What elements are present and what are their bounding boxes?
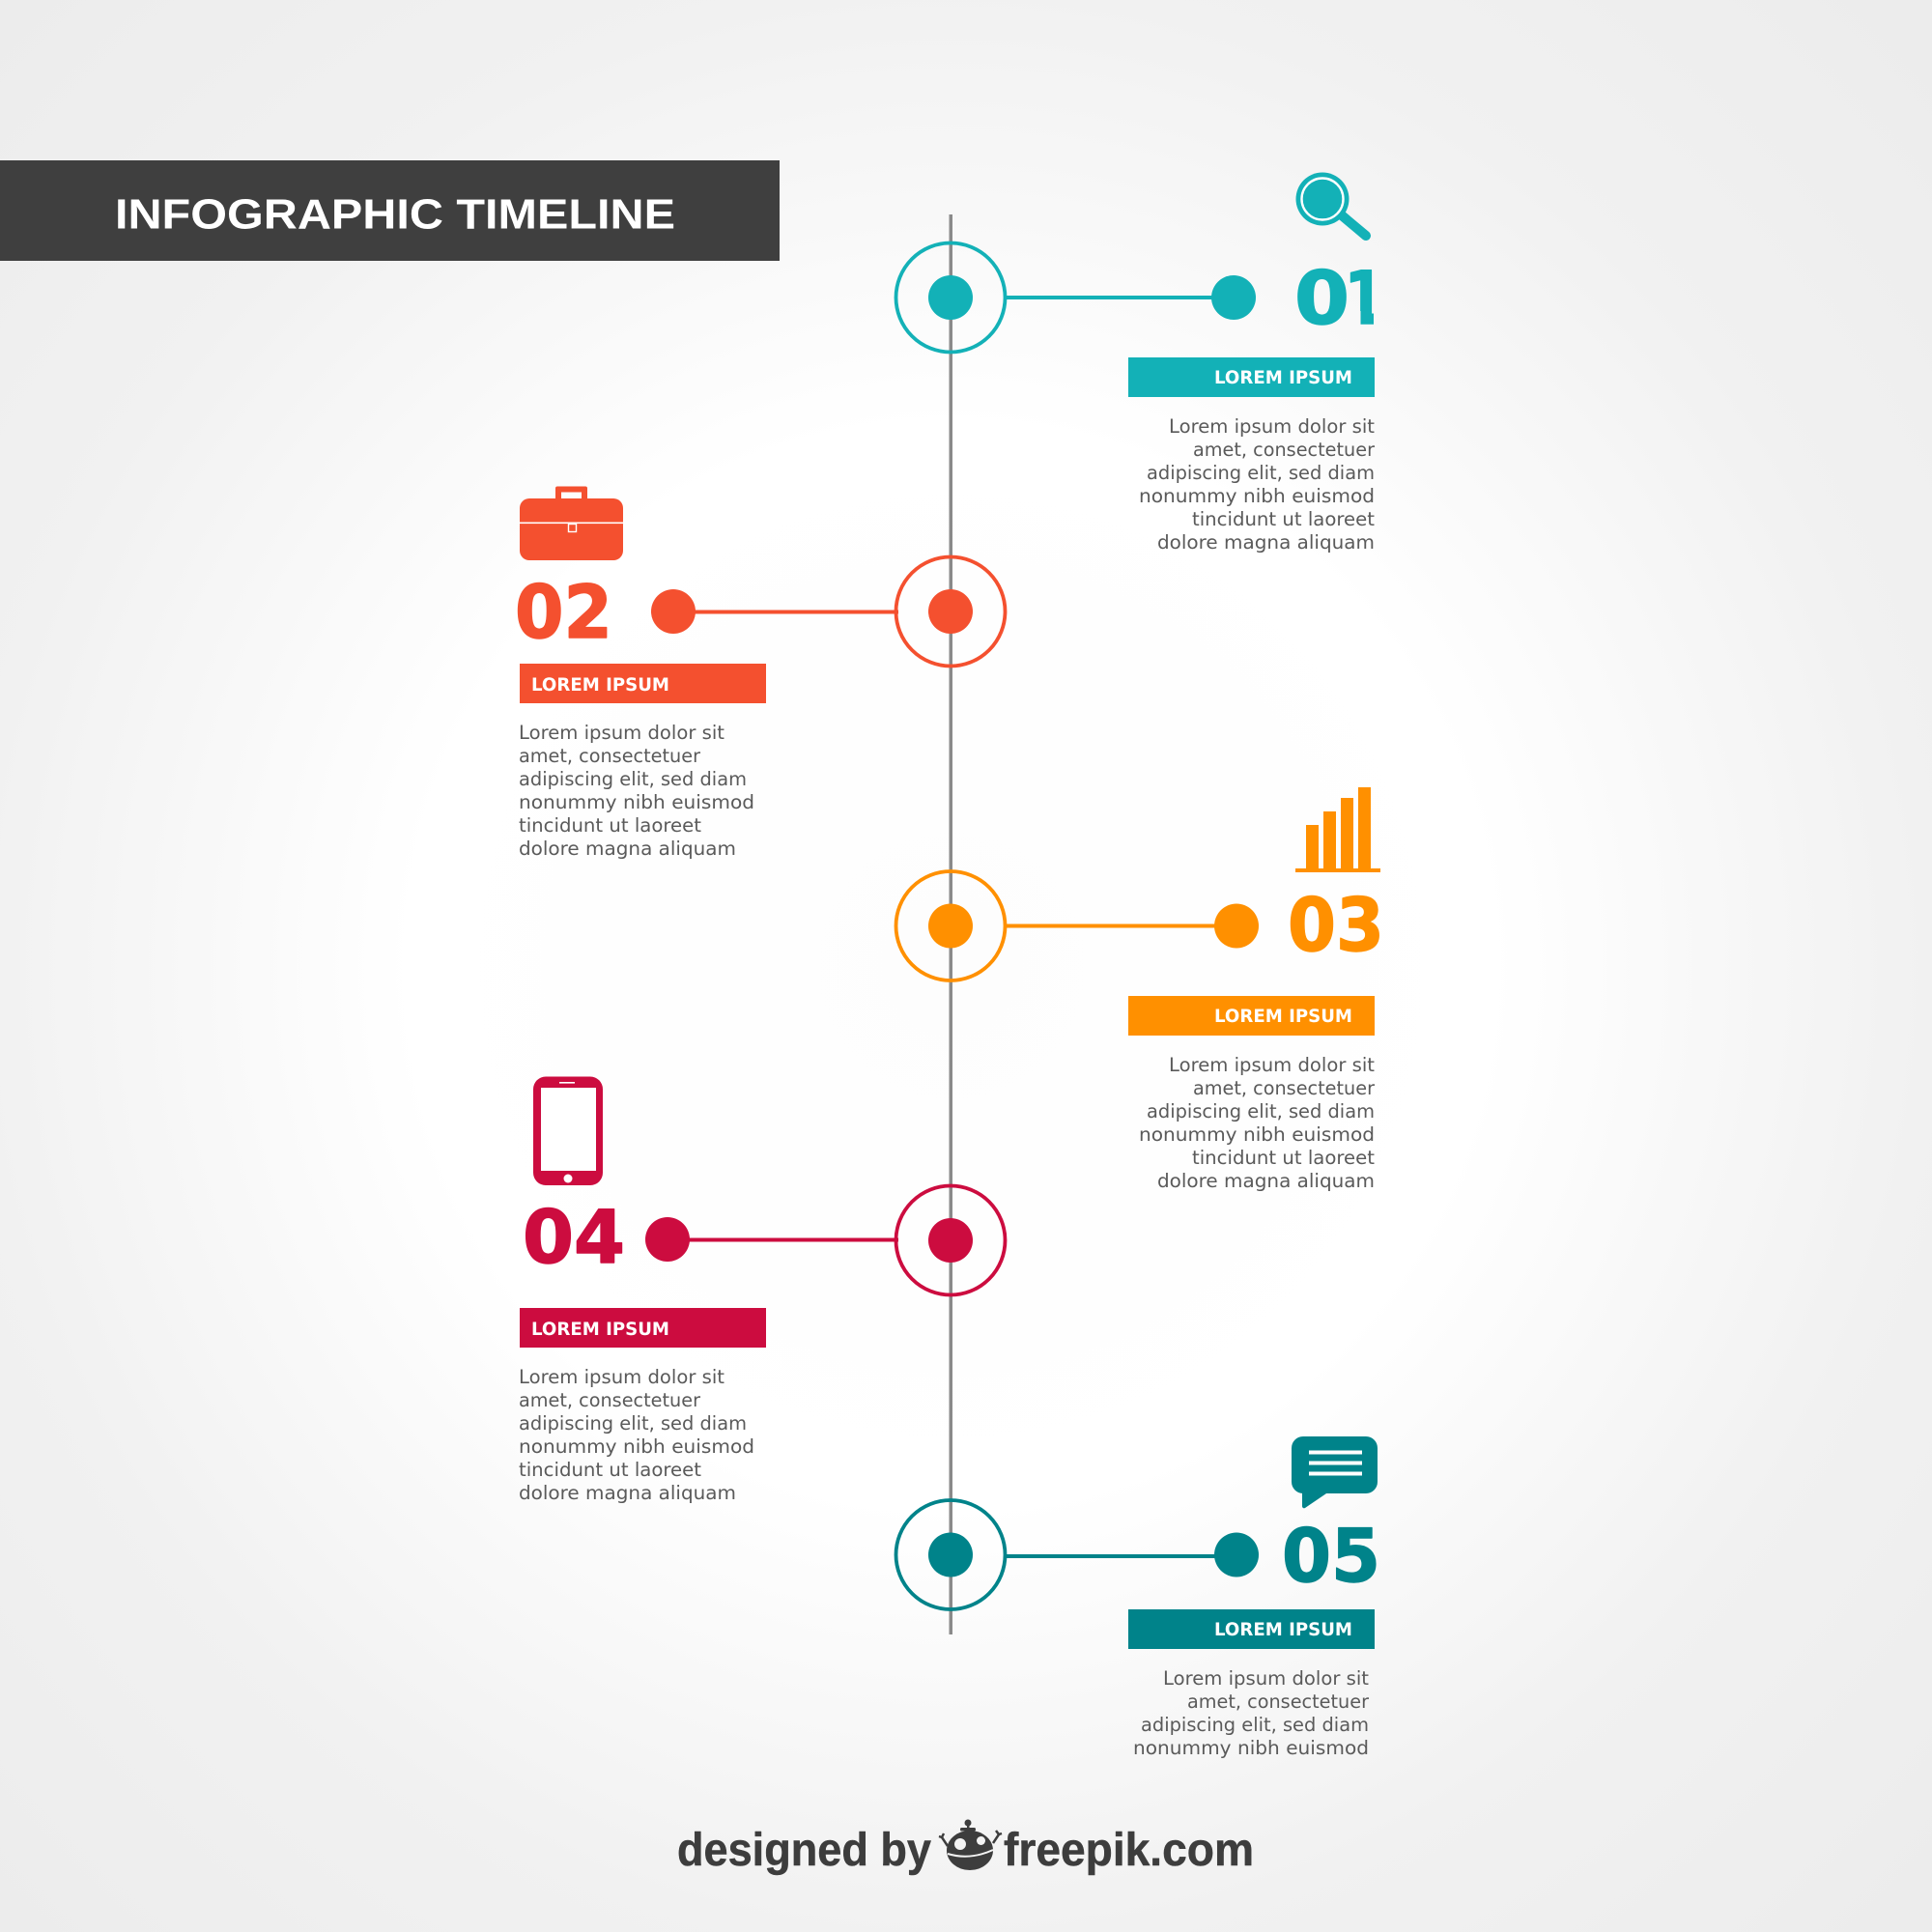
- description: adipiscing elit, sed diam: [519, 1412, 747, 1435]
- description: tincidunt ut laoreet: [519, 814, 701, 837]
- ring node: [896, 871, 1005, 980]
- ring node: [896, 243, 1005, 352]
- footer credit: freepik.com: [1004, 1825, 1254, 1876]
- label bar: [1128, 357, 1375, 397]
- description: nonummy nibh euismod: [519, 1435, 754, 1458]
- milestone 03: [896, 787, 1384, 1192]
- description: Lorem ipsum dolor sit: [1169, 415, 1375, 438]
- number: 1: [1345, 255, 1385, 341]
- label bar: LOREM IPSUM: [531, 1319, 669, 1340]
- description: dolore magna aliquam: [1157, 531, 1375, 554]
- description: [519, 722, 754, 860]
- connector and end dot: [1005, 1532, 1259, 1577]
- description: tincidunt ut laoreet: [1192, 508, 1375, 530]
- description: adipiscing elit, sed diam: [1141, 1714, 1369, 1736]
- label bar: [520, 1308, 766, 1348]
- description: amet, consectetuer: [1187, 1690, 1370, 1713]
- milestone 04: [519, 1076, 1005, 1504]
- ring node: [896, 1186, 1005, 1294]
- footer credit: designed by: [677, 1825, 931, 1876]
- description: amet, consectetuer: [1193, 439, 1376, 461]
- description: Lorem ipsum dolor sit: [1163, 1667, 1369, 1690]
- description: [519, 1366, 754, 1504]
- label bar: [1128, 996, 1375, 1036]
- description: amet, consectetuer: [519, 745, 701, 767]
- description: nonummy nibh euismod: [519, 791, 754, 813]
- ring node: [896, 556, 1005, 667]
- description: dolore magna aliquam: [1157, 1170, 1375, 1192]
- description: amet, consectetuer: [519, 1389, 701, 1411]
- title banner: INFOGRAPHIC TIMELINE: [115, 191, 675, 238]
- number: 0: [1294, 255, 1350, 341]
- label bar: [1128, 1609, 1375, 1649]
- description: dolore magna aliquam: [519, 1482, 736, 1504]
- number: [1297, 269, 1374, 326]
- milestone 05: [896, 1436, 1380, 1759]
- description: [1139, 415, 1376, 554]
- timeline axis: [949, 214, 952, 1634]
- description: Lorem ipsum dolor sit: [519, 1366, 724, 1388]
- description: adipiscing elit, sed diam: [1147, 462, 1375, 484]
- description: amet, consectetuer: [1193, 1077, 1376, 1099]
- description: dolore magna aliquam: [519, 838, 736, 860]
- description: Lorem ipsum dolor sit: [1169, 1054, 1375, 1076]
- label bar: LOREM IPSUM: [1214, 1006, 1352, 1027]
- description: [1133, 1667, 1370, 1759]
- label bar: LOREM IPSUM: [531, 674, 669, 696]
- label bar: LOREM IPSUM: [1214, 1619, 1352, 1640]
- connector and end dot: [1005, 904, 1259, 949]
- icon: smartphone: [533, 1076, 603, 1185]
- description: tincidunt ut laoreet: [1192, 1147, 1375, 1169]
- milestone 02: [515, 487, 1005, 860]
- icon: freepik robot: [939, 1820, 1002, 1870]
- footer credit: [677, 1820, 1254, 1876]
- description: nonummy nibh euismod: [1139, 1123, 1375, 1146]
- connector and end dot: [1005, 275, 1256, 320]
- label bar: [520, 664, 766, 703]
- number: 02: [515, 569, 612, 655]
- description: adipiscing elit, sed diam: [519, 768, 747, 790]
- icon: magnifying glass: [1296, 172, 1366, 236]
- description: adipiscing elit, sed diam: [1147, 1100, 1375, 1122]
- description: Lorem ipsum dolor sit: [519, 722, 724, 744]
- number: 04: [523, 1194, 625, 1280]
- description: nonummy nibh euismod: [1133, 1737, 1369, 1759]
- milestone 01: [896, 172, 1385, 554]
- connector and end dot: [651, 589, 898, 634]
- icon: briefcase: [520, 487, 623, 560]
- icon: bar chart: [1295, 787, 1380, 872]
- number: 05: [1282, 1513, 1380, 1599]
- label bar: LOREM IPSUM: [1214, 367, 1352, 388]
- description: nonummy nibh euismod: [1139, 485, 1375, 507]
- number: 03: [1288, 882, 1384, 968]
- description: tincidunt ut laoreet: [519, 1459, 701, 1481]
- icon: speech bubble: [1292, 1436, 1378, 1508]
- ring node: [896, 1500, 1005, 1609]
- title banner: [0, 160, 780, 261]
- connector and end dot: [645, 1217, 898, 1262]
- description: [1139, 1054, 1376, 1192]
